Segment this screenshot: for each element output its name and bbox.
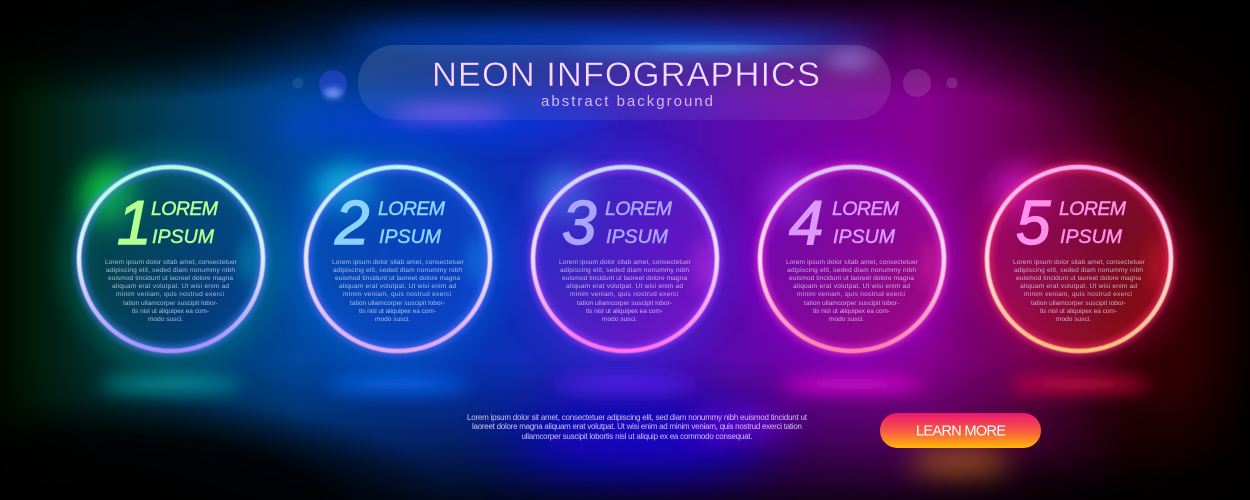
body text 4: aliquam erat volutpat. Ut wisi enim ad — [793, 283, 910, 290]
body text 5: euismod tincidunt ut laoreet dolore magna — [1016, 275, 1141, 282]
body text 3: aliquam erat volutpat. Ut wisi enim ad — [566, 283, 683, 290]
body text 4: Lorem ipsum dolor sitab amet, consectetuer — [786, 259, 919, 266]
button glow — [910, 452, 1010, 472]
body text 2: aliquam erat volutpat. Ut wisi enim ad — [339, 283, 456, 290]
body text 4: minim veniam, quis nostrud exerci — [797, 291, 906, 298]
body text 5: aliquam erat volutpat. Ut wisi enim ad — [1020, 283, 1137, 290]
footer text: Lorem ipsum dolor sit amet, consectetuer adipiscing elit, sed diam nonummy nibh euismod tincidunt ut — [467, 413, 808, 422]
body text 2: modo susci. — [375, 316, 410, 323]
learn more button — [880, 413, 1041, 448]
body text 5: tis nisl ut aliquipex ea com- — [1040, 308, 1117, 315]
body text 3 — [559, 259, 692, 323]
body text 4: tation ullamcorper suscipit lobor- — [804, 300, 899, 307]
number 1: 1 — [117, 189, 151, 258]
body text 5: minim veniam, quis nostrud exerci — [1024, 291, 1133, 298]
body text 5: Lorem ipsum dolor sitab amet, consectetuer — [1013, 259, 1146, 266]
body text 4 — [786, 259, 919, 323]
heading 1 — [151, 198, 219, 248]
body text 3: Lorem ipsum dolor sitab amet, consectetuer — [559, 259, 692, 266]
body text 1: Lorem ipsum dolor sitab amet, consectetuer — [105, 259, 238, 266]
heading 4 — [832, 198, 900, 248]
number 3: 3 — [562, 189, 596, 258]
heading 1: LOREM — [151, 198, 219, 220]
heading 5: IPSUM — [1060, 226, 1123, 248]
body text 2: adipiscing elit, seded diam nonummy nibh — [333, 267, 462, 274]
number 2: 2 — [334, 189, 369, 258]
body text 2: tation ullamcorper suscipit lobor- — [350, 300, 445, 307]
body text 2: minim veniam, quis nostrud exerci — [343, 291, 452, 298]
circle 4 — [754, 161, 950, 357]
body text 3: tation ullamcorper suscipit lobor- — [577, 300, 672, 307]
number 5: 5 — [1016, 189, 1051, 258]
heading 2 — [378, 198, 446, 248]
circle 2 — [300, 161, 496, 357]
body text 5: tation ullamcorper suscipit lobor- — [1031, 300, 1126, 307]
body text 4: euismod tincidunt ut laoreet dolore magna — [789, 275, 914, 282]
decorative bubbles: left — [292, 70, 347, 98]
body text 3: tis nisl ut aliquipex ea com- — [586, 308, 663, 315]
heading 3 — [605, 198, 673, 248]
body text 1 — [105, 259, 238, 323]
body text 2: Lorem ipsum dolor sitab amet, consectetuer — [332, 259, 465, 266]
body text 2: tis nisl ut aliquipex ea com- — [359, 308, 436, 315]
heading 4: LOREM — [832, 198, 900, 220]
footer text: ullamcorper suscipit lobortis nisl ut aliquip ex ea commodo consequat. — [522, 432, 752, 441]
body text 1: adipiscing elit, seded diam nonummy nibh — [106, 267, 235, 274]
body text 3: adipiscing elit, seded diam nonummy nibh — [560, 267, 689, 274]
body text 4: tis nisl ut aliquipex ea com- — [813, 308, 890, 315]
title: NEON INFOGRAPHICS — [432, 56, 820, 94]
learn more button: LEARN MORE — [916, 424, 1006, 440]
footer text — [467, 413, 808, 441]
heading 5: LOREM — [1059, 198, 1127, 220]
body text 1: tis nisl ut aliquipex ea com- — [132, 308, 209, 315]
heading 3: LOREM — [605, 198, 673, 220]
body text 4: modo susci. — [829, 316, 864, 323]
body text 3: modo susci. — [602, 316, 637, 323]
subtitle: abstract background — [541, 93, 713, 110]
floor reflections — [99, 377, 1151, 391]
footer text: laoreet dolore magna aliquam erat volutpat. Ut wisi enim ad minim veniam, quis nostrud exerci tation — [472, 422, 802, 431]
body text 3: minim veniam, quis nostrud exerci — [570, 291, 679, 298]
body text 1: tation ullamcorper suscipit lobor- — [123, 300, 218, 307]
body text 1: aliquam erat volutpat. Ut wisi enim ad — [112, 283, 229, 290]
circle 1 — [73, 161, 269, 357]
body text 1: modo susci. — [148, 316, 183, 323]
body text 5: modo susci. — [1056, 316, 1091, 323]
heading 5 — [1059, 198, 1127, 248]
body text 2 — [332, 259, 465, 323]
heading 3: IPSUM — [606, 226, 669, 248]
number 4: 4 — [789, 189, 823, 258]
circle 3 — [527, 161, 723, 357]
heading 2: IPSUM — [379, 226, 442, 248]
heading 1: IPSUM — [152, 226, 215, 248]
body text 5: adipiscing elit, seded diam nonummy nibh — [1014, 267, 1143, 274]
body text 3: euismod tincidunt ut laoreet dolore magna — [562, 275, 687, 282]
body text 5 — [1013, 259, 1146, 323]
decorative bubbles: right — [903, 69, 958, 97]
body text 1: minim veniam, quis nostrud exerci — [116, 291, 225, 298]
header pill — [358, 45, 891, 120]
circle 5 — [981, 161, 1177, 357]
body text 4: adipiscing elit, seded diam nonummy nibh — [787, 267, 916, 274]
heading 4: IPSUM — [833, 226, 896, 248]
body text 1: euismod tincidunt ut laoreet dolore magna — [108, 275, 233, 282]
heading 2: LOREM — [378, 198, 446, 220]
body text 2: euismod tincidunt ut laoreet dolore magna — [335, 275, 460, 282]
